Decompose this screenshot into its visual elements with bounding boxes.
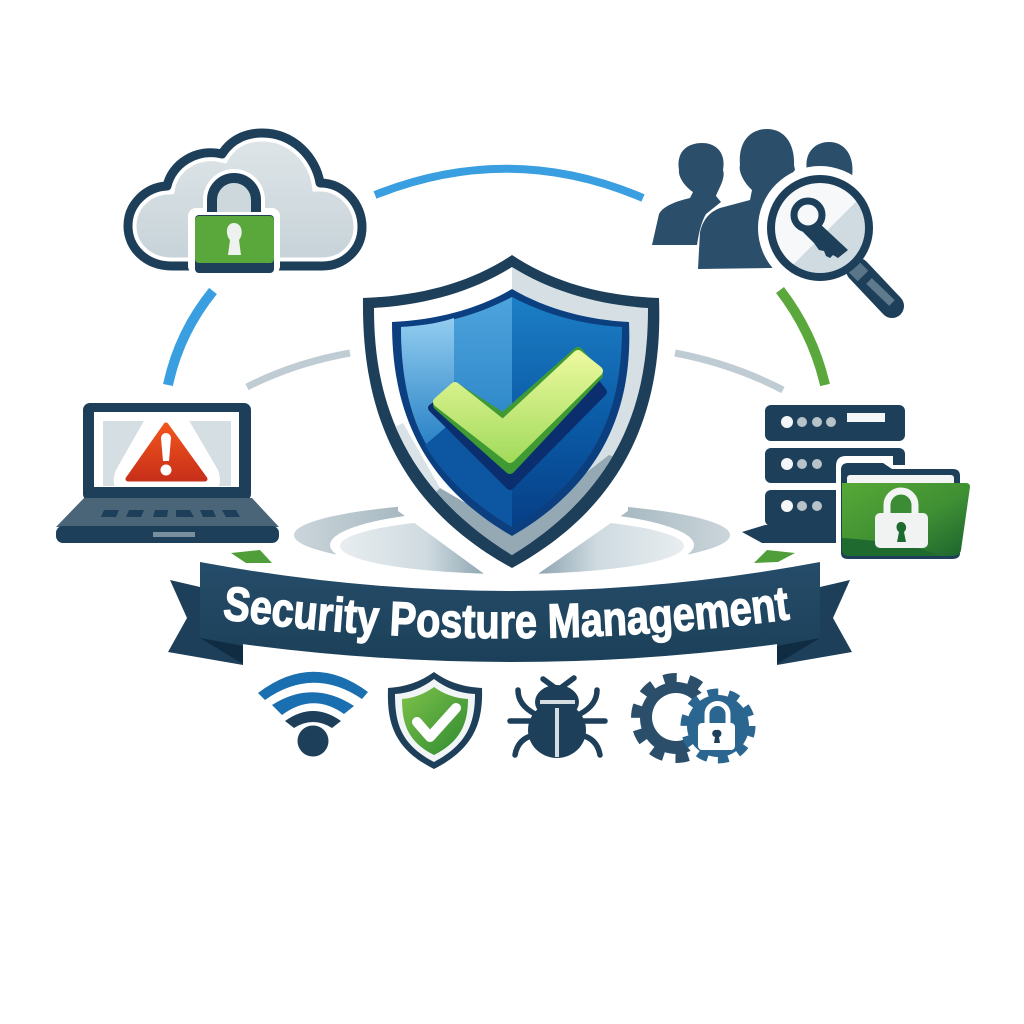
- folder halo: [836, 456, 905, 563]
- folder paper: [847, 475, 954, 487]
- laptop screen: [94, 412, 239, 487]
- icon: wifi: [258, 672, 368, 756]
- right tail: [777, 580, 852, 665]
- folder back: [841, 463, 960, 559]
- shield lower-left facet: [425, 402, 512, 527]
- ribbon main band: [200, 562, 820, 662]
- folder front lower shade: [842, 538, 940, 556]
- green accent: left: [231, 550, 272, 563]
- padlock halo: [188, 169, 280, 274]
- magnifier lens: [771, 179, 869, 277]
- padlock green face: [195, 216, 274, 263]
- folder front: [842, 483, 970, 556]
- exclamation mark: [160, 433, 172, 476]
- gear padlock: [707, 704, 728, 725]
- laptop lid: [83, 403, 251, 501]
- green accent: right: [754, 550, 795, 563]
- connecting arc: left blue: [168, 291, 213, 385]
- magnifier handle: [858, 270, 892, 306]
- icon: small green shield: [388, 672, 482, 769]
- shield band: lower facets: [396, 423, 612, 555]
- body: [528, 685, 586, 758]
- shield band: left white: [374, 267, 512, 555]
- shield outer rim: [363, 255, 659, 568]
- keyhole: [227, 223, 242, 255]
- check mark face: [438, 355, 598, 458]
- server unit 2: [765, 448, 905, 483]
- title text: [222, 619, 790, 638]
- icon: server stack with locked folder: [742, 405, 970, 563]
- white check: [417, 708, 456, 737]
- laptop keys: [101, 510, 240, 517]
- connecting arc: top blue: [375, 169, 643, 198]
- cloud inner white line: [128, 133, 362, 266]
- icon: users with magnifier and key: [652, 129, 892, 306]
- title ribbon: [168, 562, 852, 665]
- person: left: [652, 143, 724, 245]
- icon: bug: [510, 678, 605, 758]
- connecting arc: right grey: [675, 353, 783, 390]
- right fold: [777, 638, 820, 664]
- shield blue: right half: [512, 297, 622, 527]
- cloud outline: [128, 133, 362, 266]
- small gear: [681, 689, 755, 763]
- laptop deck: [56, 498, 279, 527]
- folder lock: [875, 491, 928, 548]
- trackpad slot: [153, 532, 195, 537]
- legs: [510, 690, 605, 755]
- floor rings: [294, 495, 730, 581]
- icon: laptop with warning: [56, 403, 279, 543]
- wing lines: [540, 702, 575, 757]
- title ribbon: Security Posture Management: [224, 586, 790, 644]
- large gear: [636, 678, 716, 758]
- shield light strip: [401, 318, 454, 444]
- magnifier neck: [854, 267, 863, 276]
- laptop front bar: [56, 526, 279, 543]
- server base: [742, 525, 845, 543]
- key: [794, 201, 848, 258]
- check mark shadow: [432, 360, 603, 486]
- magnifier halo: [758, 166, 882, 290]
- magnifier handle highlight: [869, 281, 892, 303]
- connecting arc: right green: [780, 290, 825, 385]
- person: center: [698, 129, 795, 269]
- shield inner dark blue: [392, 289, 629, 536]
- screen panel: [103, 421, 231, 486]
- warning triangle: [128, 425, 205, 479]
- left tail: [168, 580, 243, 665]
- shield blue: left half: [401, 297, 512, 527]
- connecting arc: left grey: [247, 353, 350, 387]
- person: right: [806, 142, 853, 177]
- central shield: [360, 255, 664, 572]
- cloud fill: [128, 133, 362, 266]
- server unit 3: [765, 490, 855, 526]
- icon: cloud with padlock: [128, 133, 362, 274]
- server unit 1: [765, 405, 905, 441]
- padlock shackle: [212, 178, 256, 212]
- icon: gears with lock: [636, 678, 755, 763]
- left fold: [200, 638, 243, 664]
- padlock body: [195, 215, 274, 273]
- shield band: right grey: [512, 267, 648, 555]
- antennae: [543, 678, 574, 690]
- check mark green edge: [438, 352, 598, 469]
- warning halo: [114, 412, 220, 487]
- shield halo: [363, 255, 659, 568]
